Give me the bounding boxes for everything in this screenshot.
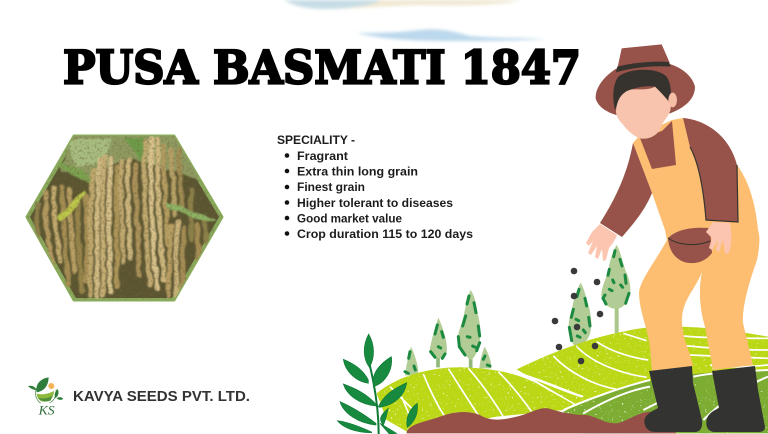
hair xyxy=(613,70,671,110)
cloud: lower xyxy=(356,29,545,41)
farmer left hand xyxy=(586,224,617,261)
farmer boot left xyxy=(644,366,702,432)
field front light green xyxy=(377,367,580,433)
hat band xyxy=(616,62,671,72)
bullet list: Finest grain xyxy=(297,180,365,194)
bullet list: Extra thin long grain xyxy=(297,164,418,178)
face xyxy=(616,87,671,139)
field back light green xyxy=(517,327,768,407)
farmer shirt chest xyxy=(640,121,676,169)
field dark green xyxy=(563,370,768,433)
sleeve outline xyxy=(690,147,738,222)
cloud: top xyxy=(284,0,520,9)
bowl xyxy=(668,228,712,263)
bullet list: Crop duration 115 to 120 days xyxy=(297,227,473,241)
ear xyxy=(668,93,677,107)
logo icon: KS xyxy=(38,403,55,417)
farmer right sleeve xyxy=(683,118,738,222)
list heading: SPECIALITY - xyxy=(277,133,355,147)
farmer left arm xyxy=(600,143,652,237)
hexagon frame xyxy=(27,136,222,300)
farmer boot right xyxy=(706,366,765,432)
farmer apron and legs xyxy=(633,118,759,372)
bullet list: Fragrant xyxy=(297,149,348,163)
farmer xyxy=(586,44,765,432)
leafy plant xyxy=(337,334,418,434)
company name: KAVYA SEEDS PVT. LTD. xyxy=(73,388,250,405)
company logo xyxy=(28,377,250,417)
title: PUSA BASMATI 1847 xyxy=(63,40,581,94)
farmer right hand xyxy=(706,222,731,254)
logo icon xyxy=(28,377,63,417)
landscape illustration xyxy=(337,245,768,434)
farmer head and hat xyxy=(596,44,695,139)
rice panicles photo xyxy=(27,136,222,300)
hat crown xyxy=(617,44,670,72)
bullet list: Good market value xyxy=(297,212,402,226)
seeds xyxy=(552,268,603,364)
bullet list xyxy=(285,149,473,241)
trees xyxy=(405,245,630,375)
hat brim xyxy=(596,63,695,115)
speciality list xyxy=(277,133,473,241)
soil mound xyxy=(407,408,677,433)
bullet list: Higher tolerant to diseases xyxy=(297,196,453,210)
rice photo hexagon xyxy=(26,134,224,302)
